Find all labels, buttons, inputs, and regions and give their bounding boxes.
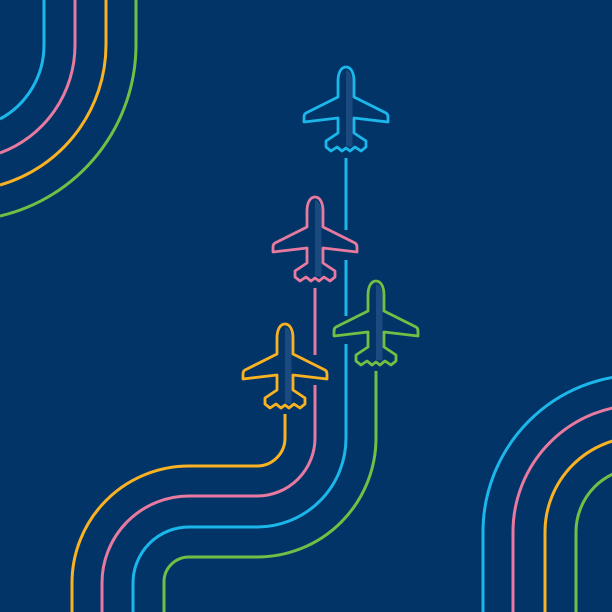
trails <box>72 158 376 612</box>
plane pink <box>273 197 357 281</box>
top-left arcs <box>0 0 136 216</box>
plane green <box>334 281 418 365</box>
plane yellow <box>243 324 327 408</box>
bottom-right arcs <box>483 375 612 612</box>
plane blue <box>304 67 388 151</box>
